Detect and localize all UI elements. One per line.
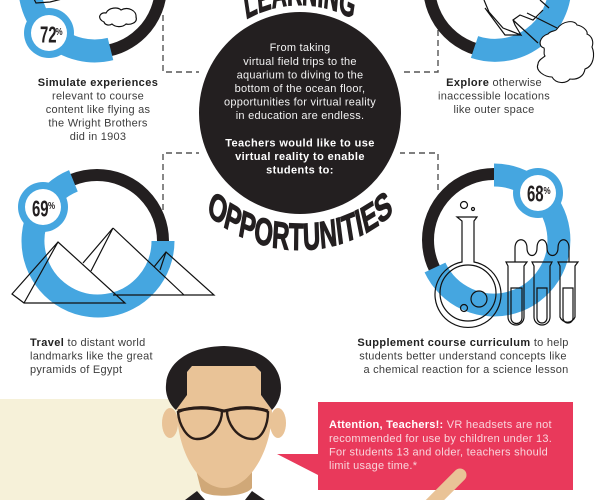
- text: teachers lead-in: students to:: [266, 164, 334, 176]
- text: simulate experiences: the Wright Brothers: [48, 118, 148, 130]
- text: teachers lead-in: virtual reality to enable: [235, 151, 365, 163]
- hair: [166, 346, 281, 410]
- text: teachers lead-in: Teachers would like to use: [225, 138, 375, 150]
- icon: exhaust cloud: [537, 22, 594, 83]
- icon: pyramids: [12, 228, 214, 303]
- badge: 68 percent: 68: [527, 181, 544, 207]
- text: supplement: a chemical reaction for a science lesson: [363, 364, 569, 376]
- text: simulate experiences: did in 1903: [70, 131, 126, 143]
- text: intro: bottom of the ocean floor,: [235, 83, 365, 95]
- neck: [196, 470, 252, 496]
- text: intro: From taking: [270, 42, 330, 54]
- badge: 72 percent: 72: [40, 22, 57, 48]
- panel: ring explore: [429, 0, 594, 83]
- text: intro: in education are endless.: [236, 110, 364, 122]
- text: supplement: Supplement course curriculum: [357, 337, 531, 349]
- text: explore: Explore: [446, 77, 489, 89]
- lapels: [185, 491, 265, 500]
- text: explore: inaccessible locations: [438, 90, 550, 102]
- illustration: teacher: [162, 346, 286, 500]
- icon: airplane: [34, 0, 62, 3]
- panel: center circle: [199, 12, 401, 214]
- text: intro: opportunities for virtual reality: [224, 96, 376, 108]
- text: intro: aquarium to diving to the: [237, 70, 363, 82]
- arm: [425, 475, 460, 500]
- text: supplement: to help: [531, 337, 569, 349]
- text: supplement: students better understand concepts like: [359, 350, 567, 362]
- face: [177, 366, 272, 488]
- badge: 72 percent: [24, 8, 74, 58]
- text: travel: to distant world: [64, 337, 146, 349]
- text: simulate experiences: content like flying as: [46, 104, 151, 116]
- badge: 69 percent: %: [48, 200, 55, 211]
- text: intro: virtual field trips to the: [243, 56, 357, 68]
- text: simulate experiences: relevant to course: [52, 90, 144, 102]
- badge: 69 percent: 69: [32, 196, 49, 222]
- callout text: For students 13 and older, teachers should: [329, 446, 548, 458]
- ears: [162, 408, 178, 438]
- text: simulate experiences: Simulate experiences: [38, 77, 158, 89]
- panel: ring curriculum: [428, 168, 578, 327]
- glasses: [178, 407, 268, 439]
- callout text: recommended for use by children under 13.: [329, 433, 552, 445]
- badge: 68 percent: %: [544, 185, 551, 196]
- icon: cloud: [100, 8, 136, 27]
- heading: opportunities: OPPORTUNITIES: [209, 192, 392, 250]
- icon: flask: [435, 217, 501, 327]
- icon: rocket: [484, 0, 557, 43]
- callout text: Attention, Teachers!:: [329, 419, 443, 431]
- panel: ring travel: [12, 175, 214, 307]
- callout text: limit usage time.*: [329, 460, 418, 472]
- background panel: cream: [0, 399, 200, 500]
- text: travel: landmarks like the great: [30, 350, 153, 362]
- text: explore: like outer space: [453, 104, 535, 116]
- icon: test tubes: [506, 240, 578, 325]
- text: travel: pyramids of Egypt: [30, 364, 122, 376]
- badge: 72 percent: %: [56, 26, 63, 37]
- callout text: VR headsets are not: [443, 419, 552, 431]
- text: explore: otherwise: [489, 77, 542, 89]
- badge: 68 percent: [513, 168, 563, 218]
- callout: attention teachers: [277, 402, 573, 500]
- panel: ring simulate experiences: [24, 0, 161, 58]
- text: travel: Travel: [30, 337, 64, 349]
- badge: 69 percent: [18, 182, 68, 232]
